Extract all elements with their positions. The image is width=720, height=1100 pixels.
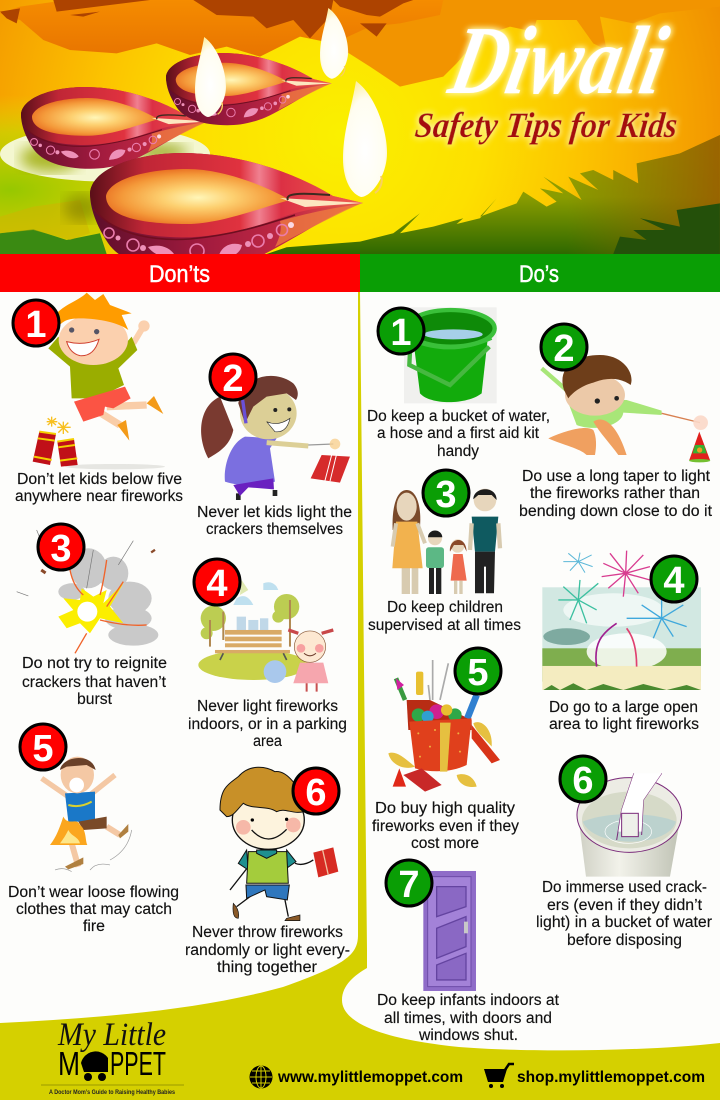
text block: indoors, or in a parking bbox=[188, 716, 347, 733]
icon: flame of top lamp bbox=[320, 8, 348, 79]
icon: curly haired boy with crackers bbox=[220, 767, 338, 921]
number badge: 1 bbox=[25, 304, 47, 346]
text block: area bbox=[253, 733, 282, 750]
icon: flame of left lamp bbox=[195, 37, 226, 117]
icon: green bucket bbox=[404, 307, 497, 403]
number badge: 5 bbox=[32, 728, 54, 770]
panel: don't 4 bbox=[188, 559, 347, 750]
number badge bbox=[423, 470, 469, 516]
text block: crackers that haven’t bbox=[22, 674, 167, 691]
number badge: 2 bbox=[222, 358, 244, 400]
icon: crouching boy with taper bbox=[542, 355, 710, 462]
logo: My Little Moppet: M bbox=[58, 1045, 80, 1082]
icon: cracker explosion bbox=[17, 530, 158, 653]
panel: do 1 bbox=[367, 307, 550, 460]
number badge bbox=[38, 524, 84, 570]
text block: clothes that may catch bbox=[16, 901, 172, 918]
panel: don't 3 bbox=[17, 524, 167, 708]
text block: Do buy high quality bbox=[375, 800, 515, 817]
panel: do 4 bbox=[542, 551, 701, 733]
number badge bbox=[378, 308, 424, 354]
number badge bbox=[194, 559, 240, 605]
text block bbox=[372, 800, 519, 852]
logo: My Little Moppet: A Doctor Mom’s Guide to Raising Healthy Babies bbox=[49, 1089, 175, 1096]
text block bbox=[367, 408, 550, 460]
text block: ers (even if they didn’t bbox=[547, 897, 703, 914]
icon: fireworks over open field bbox=[542, 551, 701, 690]
number badge bbox=[651, 556, 697, 602]
number badge bbox=[386, 860, 432, 906]
text block: Never light fireworks bbox=[197, 698, 338, 715]
lamp shadow bbox=[64, 194, 100, 222]
text block: Do immerse used crack- bbox=[542, 879, 707, 896]
text block bbox=[22, 655, 167, 708]
text block: thing together bbox=[217, 959, 317, 976]
subtitle: Safety Tips for Kids bbox=[413, 105, 679, 145]
number badge bbox=[20, 724, 66, 770]
heading: Don'ts bbox=[0, 254, 360, 292]
icon: flame of front lamp bbox=[343, 81, 387, 197]
text block: Don’t wear loose flowing bbox=[8, 884, 179, 901]
text block: Do keep a bucket of water, bbox=[367, 408, 550, 425]
number badge: 5 bbox=[467, 652, 489, 694]
number badge: 6 bbox=[572, 760, 594, 802]
text block: handy bbox=[437, 443, 479, 460]
number badge bbox=[293, 768, 339, 814]
number badge bbox=[210, 354, 256, 400]
icon: shopping cart bbox=[484, 1064, 514, 1088]
panel: left white background bbox=[0, 292, 358, 1023]
icon: girl with sparkler bbox=[201, 376, 350, 500]
number badge: 6 bbox=[305, 772, 327, 814]
text block: bending down close to do it bbox=[519, 503, 713, 520]
text block: cost more bbox=[411, 835, 479, 852]
shop link: shop.mylittlemoppet.com bbox=[517, 1069, 705, 1086]
heading: Do's bbox=[360, 254, 720, 292]
icon: hands immersing crackers in bucket bbox=[577, 773, 682, 877]
number badge: 7 bbox=[398, 864, 420, 906]
number badge: 2 bbox=[553, 328, 575, 370]
text block: fireworks even if they bbox=[372, 818, 519, 835]
text block bbox=[185, 924, 350, 976]
text block: supervised at all times bbox=[368, 617, 521, 634]
panel: right white background bbox=[342, 292, 720, 1050]
text block: randomly or light every- bbox=[185, 942, 350, 959]
logo: My Little Moppet: My Little bbox=[57, 1017, 166, 1053]
panel: do 5 bbox=[372, 648, 519, 852]
text block bbox=[377, 992, 560, 1044]
logo: My Little Moppet: PPET bbox=[110, 1045, 166, 1082]
text block: before disposing bbox=[567, 932, 682, 949]
icon: globe bbox=[250, 1066, 272, 1088]
text block: Do not try to reignite bbox=[22, 655, 167, 672]
icon: family of four bbox=[392, 489, 500, 594]
text block bbox=[8, 884, 179, 935]
panel: don't 5 bbox=[8, 724, 179, 935]
number badge: 1 bbox=[390, 312, 412, 354]
text block bbox=[549, 699, 699, 733]
logo: My Little Moppet bbox=[41, 1017, 184, 1096]
number badge: 4 bbox=[663, 560, 685, 602]
text block: a hose and a first aid kit bbox=[377, 425, 540, 442]
icon: top lamp bbox=[166, 53, 332, 125]
text block bbox=[188, 698, 347, 750]
number badge: 4 bbox=[206, 563, 228, 605]
heading: Don'ts: Don’ts bbox=[149, 261, 210, 288]
text block: light) in a bucket of water bbox=[536, 914, 712, 931]
panel: do 6 bbox=[536, 756, 712, 949]
panel: do 2 bbox=[519, 324, 713, 520]
text block: Never let kids light the bbox=[197, 504, 352, 521]
text block bbox=[519, 468, 713, 520]
number badge: 3 bbox=[50, 528, 72, 570]
icon: fireworks gift box bbox=[388, 660, 500, 792]
number badge: 3 bbox=[435, 474, 457, 516]
icon: boy with burning clothes bbox=[42, 757, 132, 872]
text block bbox=[15, 471, 183, 505]
panel: don't 1 bbox=[13, 293, 183, 505]
text block bbox=[197, 504, 352, 538]
panel: don't 2 bbox=[197, 354, 352, 538]
text block: fire bbox=[83, 918, 105, 935]
text block: Don’t let kids below five bbox=[17, 471, 182, 488]
text block bbox=[368, 599, 521, 634]
text block: anywhere near fireworks bbox=[15, 488, 183, 505]
panel: do 3 bbox=[368, 470, 521, 634]
number badge bbox=[560, 756, 606, 802]
text block: burst bbox=[77, 691, 113, 708]
icon: jumping boy with crackers bbox=[33, 293, 165, 469]
text block: Never throw fireworks bbox=[192, 924, 343, 941]
text block: Do use a long taper to light bbox=[522, 468, 711, 485]
panel: don't 6 bbox=[185, 767, 350, 976]
text block: windows shut. bbox=[418, 1027, 518, 1044]
icon: purple door bbox=[423, 871, 476, 991]
icon: front lamp bbox=[90, 153, 363, 254]
icon: park with bench and girl bbox=[198, 580, 333, 692]
header banner bbox=[0, 0, 720, 254]
title: Diwali bbox=[441, 8, 676, 115]
text block: the fireworks rather than bbox=[530, 485, 700, 502]
number badge bbox=[455, 648, 501, 694]
text block: crackers themselves bbox=[206, 521, 343, 538]
text block bbox=[536, 879, 712, 949]
plate glow bbox=[0, 134, 210, 182]
text block: area to light fireworks bbox=[549, 716, 699, 733]
heading: Do's: Do’s bbox=[519, 261, 559, 288]
number badge bbox=[541, 324, 587, 370]
text block: Do keep children bbox=[387, 599, 503, 616]
text block: Do keep infants indoors at bbox=[377, 992, 560, 1009]
website link: www.mylittlemoppet.com bbox=[277, 1069, 463, 1086]
icon: back-left lamp bbox=[21, 87, 209, 169]
text block: all times, with doors and bbox=[384, 1010, 552, 1027]
text block: Do go to a large open bbox=[549, 699, 698, 716]
number badge bbox=[13, 300, 59, 346]
panel: do 7 bbox=[377, 860, 560, 1044]
